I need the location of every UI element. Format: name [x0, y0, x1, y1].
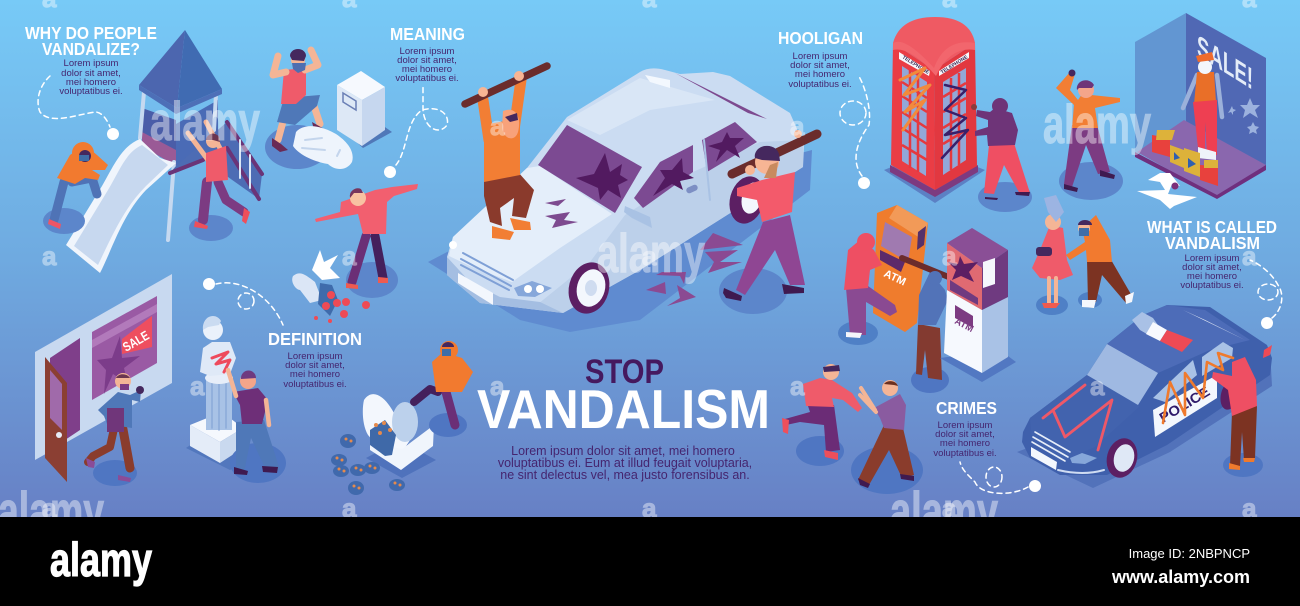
watermarks: alamy: [150, 90, 260, 152]
figure: red hooded man graffiti: [1212, 357, 1263, 477]
text block: definition: Lorem ipsum: [288, 351, 343, 362]
illustration: shop window and door: [35, 274, 172, 482]
illustration: red telephone box: [884, 17, 985, 203]
watermarks: alamy: [0, 480, 104, 542]
watermarks: a: [942, 241, 957, 271]
text block: why do people vandalize: dolor sit amet,: [61, 68, 121, 79]
watermarks: a: [190, 371, 205, 401]
text block: main description: voluptatibus ei. Eum at illud feugait voluptaria,: [498, 456, 752, 470]
footer bar: www.alamy.com: [1111, 567, 1250, 587]
illustration: shop window and door: SALE: [120, 327, 152, 355]
text block: crimes: [933, 398, 997, 459]
illustration: vandalised police car: POLICE: [1156, 383, 1213, 426]
illustration: white bin: [337, 71, 392, 148]
figure: red hooded man kicking ATM: [838, 233, 897, 345]
dashed connector: hooligan: [840, 75, 870, 189]
watermarks: a: [490, 371, 505, 401]
text block: definition: voluptatibus ei.: [283, 379, 347, 390]
text block: meaning: [390, 24, 465, 84]
title: stop vandalism: VANDALISM: [477, 378, 770, 440]
figure: person kicking vase: [315, 184, 418, 298]
watermarks: a: [42, 493, 57, 523]
watermarks: a: [642, 241, 657, 271]
dashed connector: crimes: [960, 462, 1041, 493]
illustration: toppled white statue: [293, 126, 353, 169]
text block: definition: [268, 329, 362, 390]
figure: hooded person pushing slide: [43, 142, 108, 234]
watermarks: alamy: [1043, 93, 1151, 155]
text block: meaning: MEANING: [390, 24, 465, 44]
dashed connector: why do people vandalize: [38, 76, 119, 140]
text block: meaning: dolor sit amet,: [397, 55, 457, 66]
dashed connector: definition: [203, 278, 283, 325]
text block: main description: Lorem ipsum dolor sit amet, mei homero: [511, 444, 735, 458]
watermarks: a: [342, 241, 357, 271]
text block: hooligan: Lorem ipsum: [793, 51, 848, 62]
figure: man in blue hoodie with bat: [902, 258, 951, 393]
watermarks: a: [1242, 493, 1257, 523]
text block: crimes: dolor sit amet,: [935, 429, 995, 440]
text block: definition: dolor sit amet,: [285, 360, 345, 371]
illustration: glass shards on floor: [1137, 173, 1197, 209]
text block: why do people vandalize: VANDALIZE?: [42, 39, 140, 59]
illustration: statue on pedestal: [186, 316, 260, 470]
figure: hooded man kicking planter: [414, 341, 473, 437]
text block: definition: mei homero: [290, 369, 340, 380]
text block: why do people vandalize: WHY DO PEOPLE: [25, 23, 157, 43]
text block: hooligan: HOOLIGAN: [778, 28, 863, 48]
watermarks: a: [1090, 371, 1105, 401]
text block: why do people vandalize: Lorem ipsum: [64, 58, 119, 69]
watermarks: a: [342, 493, 357, 523]
figure: defending man: [851, 380, 923, 494]
text block: why do people vandalize: voluptatibus ei.: [59, 86, 123, 97]
text block: what is called vandalism: voluptatibus ei.: [1180, 280, 1244, 291]
illustration: vandalised police car: [1017, 305, 1272, 488]
title: stop vandalism: [477, 353, 770, 440]
text block: what is called vandalism: WHAT IS CALLED: [1147, 217, 1277, 237]
text block: main description: [498, 444, 752, 482]
watermarks: alamy: [597, 222, 705, 284]
text block: crimes: CRIMES: [936, 398, 997, 418]
text block: hooligan: [778, 28, 863, 90]
text block: what is called vandalism: VANDALISM: [1165, 233, 1260, 253]
text block: main description: ne sint delectus vel, mea justo forensibus an.: [500, 468, 750, 482]
illustration: purple and white ATM: ATM: [953, 316, 975, 335]
watermarks: alamy: [890, 480, 998, 542]
figure: man spraying statue: [228, 370, 286, 483]
watermarks: a: [642, 493, 657, 523]
footer bar: [0, 517, 1300, 606]
figure: person in tank top breaking stairs: [188, 122, 250, 241]
figure: woman in red dress: [1032, 195, 1073, 315]
text block: meaning: Lorem ipsum: [400, 46, 455, 57]
text block: hooligan: voluptatibus ei.: [788, 79, 852, 90]
illustration: car shadow: [428, 150, 812, 332]
text block: meaning: voluptatibus ei.: [395, 73, 459, 84]
illustration: smashed shop display with mannequin: SALE!: [1197, 28, 1253, 96]
illustration: red telephone box: TELEPHONE: [901, 55, 931, 76]
watermarks: a: [490, 111, 505, 141]
illustration: orange ATM: ATM: [882, 268, 908, 288]
figure: man with hammer at window: [86, 373, 144, 486]
dashed connector: meaning: [384, 87, 448, 178]
watermarks: a: [790, 111, 805, 141]
footer logo: alamy: [50, 533, 152, 586]
figure: knife attacker: [782, 364, 862, 466]
text block: hooligan: mei homero: [795, 69, 845, 80]
illustration: broken vase with flowers: [292, 250, 370, 323]
watermarks: a: [1242, 241, 1257, 271]
text block: definition: DEFINITION: [268, 329, 362, 349]
text block: why do people vandalize: [25, 23, 157, 97]
watermarks: a: [790, 371, 805, 401]
text block: crimes: voluptatibus ei.: [933, 448, 997, 459]
figure: man in orange shirt throwing stone: [1056, 70, 1123, 200]
illustration: playground with slide: [66, 30, 262, 273]
text block: crimes: mei homero: [940, 438, 990, 449]
figure: man in red shirt smashing car with bat: [719, 130, 817, 314]
illustration: shards under car: [646, 233, 743, 306]
figure: hooded mugger: [1066, 215, 1134, 308]
illustration: vandalised silver car: [447, 68, 804, 318]
footer bar: Image ID: 2NBPNCP: [1129, 546, 1250, 561]
text block: meaning: mei homero: [402, 64, 452, 75]
text block: what is called vandalism: [1147, 217, 1277, 291]
illustration: scattered shrubs: [331, 434, 405, 495]
text block: hooligan: dolor sit amet,: [790, 60, 850, 71]
illustration: red telephone box: TELEPHONE: [940, 54, 970, 76]
figure: masked man stomping on statue: [265, 49, 329, 169]
text block: why do people vandalize: mei homero: [66, 77, 116, 88]
text block: what is called vandalism: Lorem ipsum: [1185, 253, 1240, 264]
illustration: purple and white ATM: [940, 228, 1016, 382]
figure: orange hoodie man on hood with bat: [465, 66, 547, 240]
watermarks: a: [942, 493, 957, 523]
text block: crimes: Lorem ipsum: [938, 420, 993, 431]
dashed connector: what is called vandalism: [1250, 260, 1282, 329]
text block: what is called vandalism: mei homero: [1187, 271, 1237, 282]
illustration: smashed shop display with mannequin: [1135, 13, 1266, 199]
watermarks: a: [42, 241, 57, 271]
title: stop vandalism: STOP: [585, 353, 664, 391]
illustration: overturned planter: [363, 394, 436, 478]
text block: what is called vandalism: dolor sit amet,: [1182, 262, 1242, 273]
figure: hooded man with spray can: [971, 98, 1032, 212]
illustration: orange ATM: [873, 205, 928, 332]
